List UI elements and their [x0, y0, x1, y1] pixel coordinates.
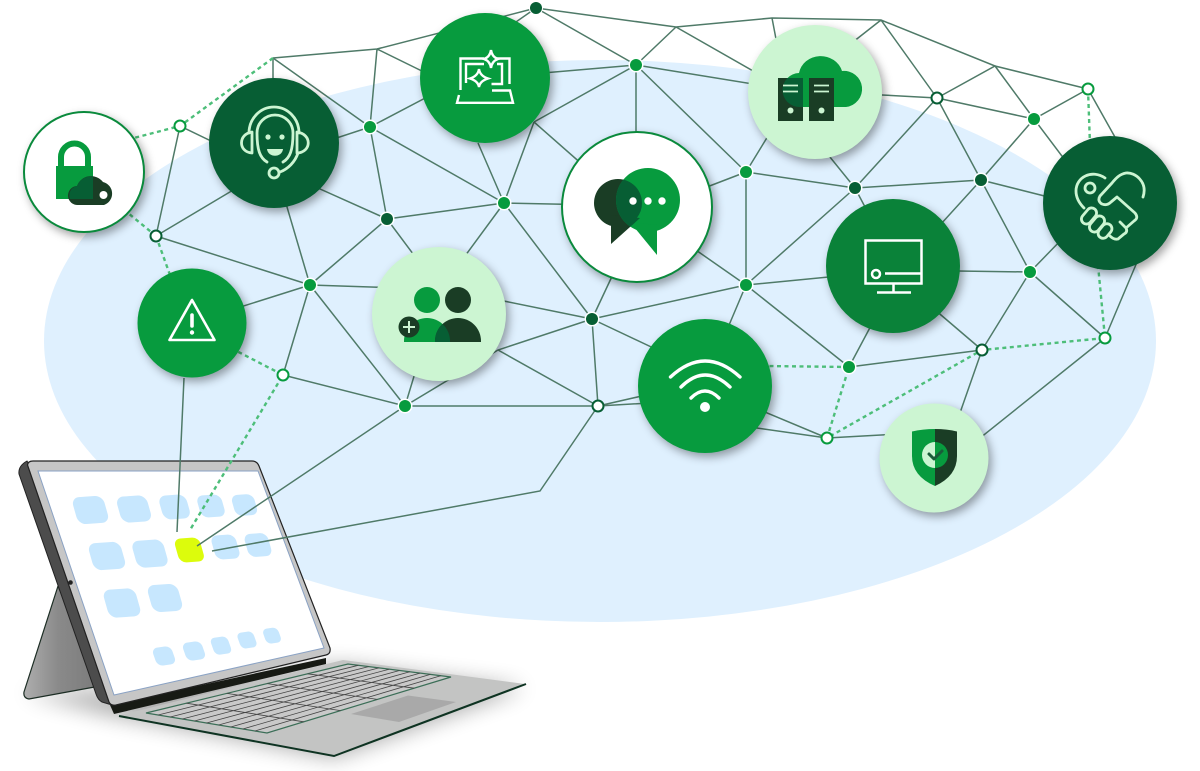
- icon: support agent: [242, 107, 308, 178]
- shield circle: [880, 404, 988, 512]
- screen: [38, 471, 324, 695]
- icon: security shield: [912, 429, 957, 486]
- hinge: [110, 658, 326, 714]
- icon: padlock with cloud: [56, 144, 112, 205]
- AI laptop circle: [420, 13, 550, 143]
- monitor circle: [826, 199, 960, 333]
- icon: wifi: [670, 361, 740, 412]
- dashed connection lines: [128, 58, 1105, 530]
- icon: laptop with sparkles: [457, 50, 513, 103]
- network nodes: [150, 1, 1110, 444]
- tablet frame: [19, 461, 330, 705]
- chat circle: [562, 132, 712, 282]
- background ellipse: [44, 60, 1156, 622]
- network connection lines: [156, 8, 1140, 551]
- app icons: [71, 494, 282, 666]
- lock circle: [24, 112, 144, 232]
- icon: speech bubbles: [594, 168, 680, 255]
- add users circle: [372, 247, 506, 381]
- headset circle: [209, 78, 339, 208]
- icon: monitor: [866, 240, 922, 292]
- tablet with keyboard: [19, 461, 526, 758]
- icon: cloud and servers: [778, 56, 862, 121]
- handshake circle: [1043, 136, 1177, 270]
- wifi circle: [638, 319, 772, 453]
- ground shadow: [22, 665, 525, 758]
- icon: group with plus: [398, 287, 481, 342]
- camera: [68, 580, 73, 585]
- kickstand: [24, 586, 100, 699]
- highlighted app icon: [173, 537, 206, 563]
- keyboard base: [119, 660, 526, 756]
- icon: handshake: [1076, 173, 1144, 240]
- warning circle: [138, 268, 246, 378]
- cloud servers circle: [748, 25, 882, 159]
- icon: warning triangle: [170, 300, 214, 340]
